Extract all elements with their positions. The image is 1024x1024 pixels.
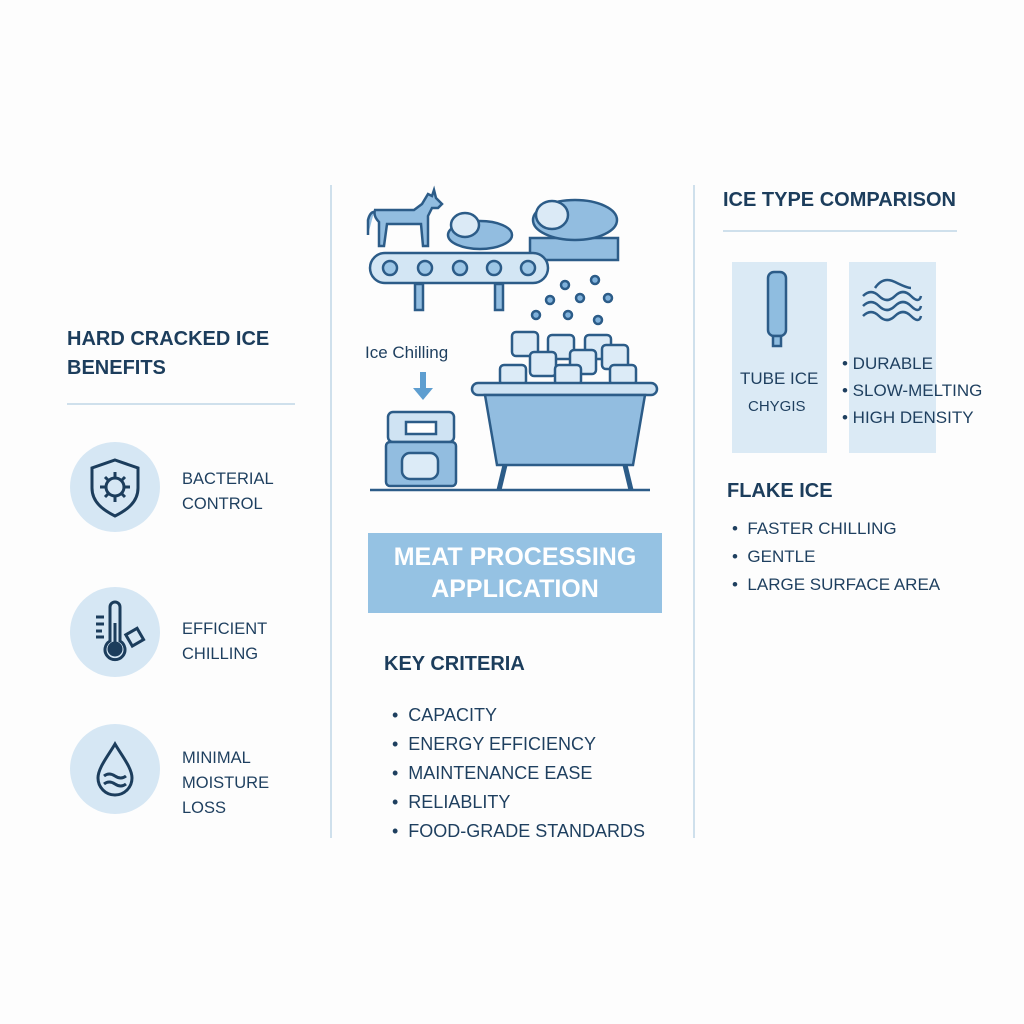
text: minimal moisture loss bbox=[182, 749, 269, 817]
label: ice chilling: Ice Chilling bbox=[365, 343, 448, 362]
text: minimal moisture loss: MINIMAL bbox=[182, 749, 251, 767]
drops bbox=[532, 276, 612, 324]
list: key criteria: • ENERGY EFFICIENCY bbox=[392, 734, 596, 754]
list: flake ice traits bbox=[732, 519, 940, 594]
list: key criteria bbox=[392, 705, 645, 841]
text: minimal moisture loss: MOISTURE bbox=[182, 774, 269, 792]
text: bacterial control: CONTROL bbox=[182, 495, 263, 513]
list: key criteria: • CAPACITY bbox=[392, 705, 497, 725]
conveyor bbox=[370, 253, 548, 283]
list: tube ice traits: • SLOW-MELTING bbox=[842, 381, 982, 400]
heading: hard cracked ice benefits bbox=[67, 328, 269, 379]
text: bacterial control bbox=[182, 470, 274, 513]
list: key criteria: • RELIABLITY bbox=[392, 792, 510, 812]
steaks bbox=[448, 221, 512, 249]
cow bbox=[368, 190, 442, 246]
list: flake ice traits: • FASTER CHILLING bbox=[732, 519, 897, 538]
heading: key criteria: KEY CRITERIA bbox=[384, 653, 525, 675]
list: tube ice traits bbox=[842, 354, 982, 427]
text: efficient chilling: EFFICIENT bbox=[182, 620, 267, 638]
ice machine bbox=[388, 412, 454, 442]
arrow bbox=[413, 372, 433, 400]
icon: shield bbox=[70, 442, 160, 532]
list: flake ice traits: • LARGE SURFACE AREA bbox=[732, 575, 940, 594]
text: bacterial control: BACTERIAL bbox=[182, 470, 274, 488]
title box: meat processing application: APPLICATION bbox=[431, 575, 599, 603]
illustration: meat processing line bbox=[366, 186, 658, 492]
heading: hard cracked ice benefits: BENEFITS bbox=[67, 357, 166, 379]
icon: waves bbox=[862, 278, 922, 322]
title box: meat processing application: MEAT PROCESSING bbox=[394, 543, 636, 571]
list: key criteria: • MAINTENANCE EASE bbox=[392, 763, 592, 783]
heading: hard cracked ice benefits: HARD CRACKED ICE bbox=[67, 328, 269, 350]
list: key criteria: • FOOD-GRADE STANDARDS bbox=[392, 821, 645, 841]
panel: tube ice: TUBE ICE bbox=[740, 369, 818, 388]
panel: tube ice bbox=[732, 262, 827, 453]
panel: tube ice: CHYGIS bbox=[748, 398, 806, 415]
list: tube ice traits: • DURABLE bbox=[842, 354, 933, 373]
ice cubes bbox=[500, 332, 636, 385]
icon: thermometer bbox=[70, 587, 160, 677]
text: minimal moisture loss: LOSS bbox=[182, 799, 226, 817]
text: efficient chilling: CHILLING bbox=[182, 645, 258, 663]
list: flake ice traits: • GENTLE bbox=[732, 547, 815, 566]
heading: flake ice: FLAKE ICE bbox=[727, 480, 833, 502]
icon: tube bbox=[766, 270, 788, 348]
text: efficient chilling bbox=[182, 620, 267, 663]
icon: water drop bbox=[70, 724, 160, 814]
tub bbox=[472, 383, 657, 395]
heading: ice type comparison: ICE TYPE COMPARISON bbox=[723, 189, 956, 211]
list: tube ice traits: • HIGH DENSITY bbox=[842, 408, 974, 427]
title box: meat processing application bbox=[368, 533, 662, 613]
panel: flake ice bbox=[849, 262, 936, 453]
